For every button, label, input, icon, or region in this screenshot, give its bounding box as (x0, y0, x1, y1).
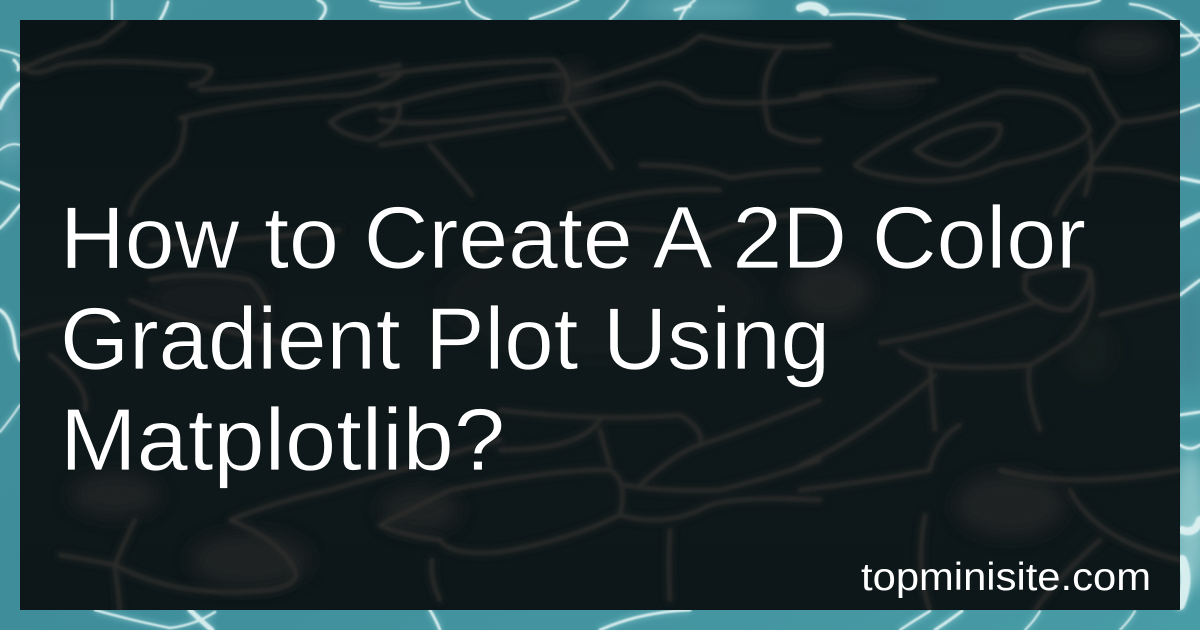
title line 2: Gradient Plot Using (60, 289, 830, 388)
title line 3: Matplotlib? (60, 390, 505, 489)
site domain: topminisite.com (861, 556, 1151, 599)
title line 1: How to Create A 2D Color (60, 188, 1086, 287)
title (60, 188, 1086, 489)
